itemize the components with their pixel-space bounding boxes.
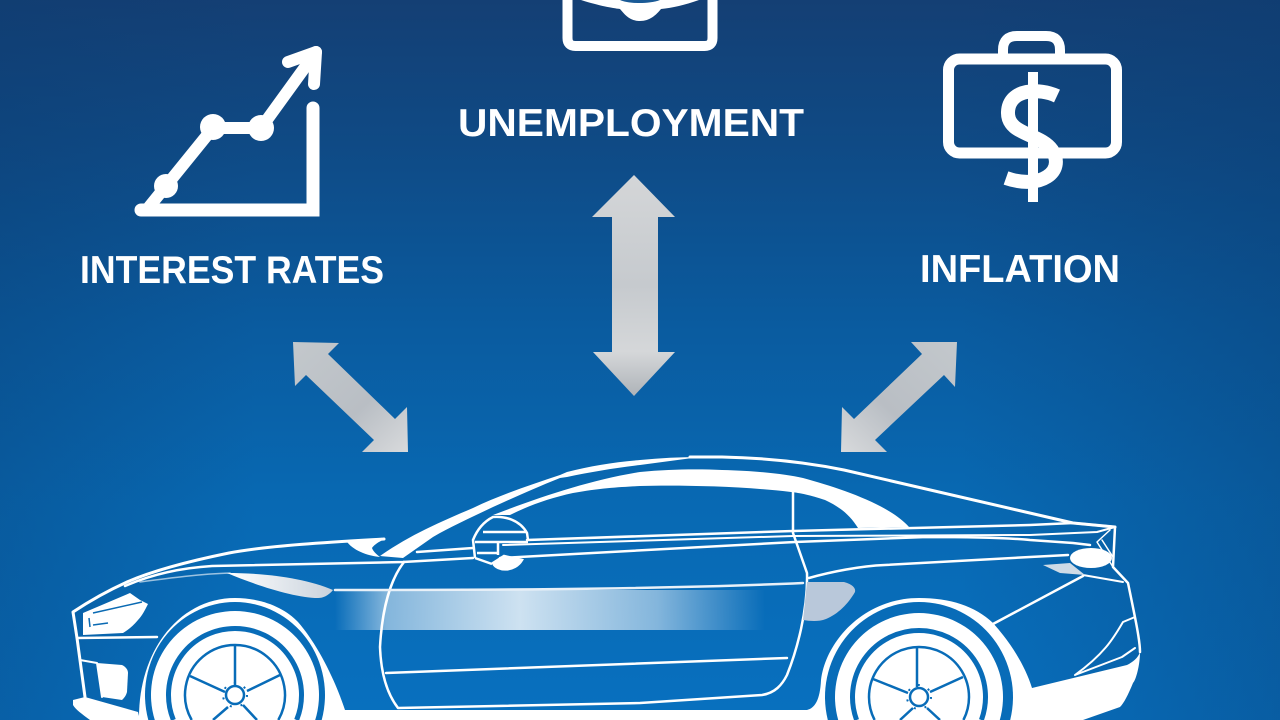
icon: interest rates chart [141,52,316,210]
taillight [1070,548,1112,568]
heading: interest rates: INTEREST RATES [80,249,384,292]
front arch and fender [139,598,345,720]
lower sill [330,710,812,720]
roof band [493,469,909,528]
door [380,492,807,708]
rear fender vent [803,582,855,621]
door highlight band [335,590,765,630]
icon: unemployment briefcase [568,0,712,46]
arrow: unemployment to car [592,175,675,396]
icon: inflation briefcase with dollar [948,36,1116,202]
arrow: inflation to car [841,342,957,452]
rear arch and bumper [807,598,1140,720]
arrow: interest rates to car [293,342,408,452]
front wheel [145,602,325,720]
rear wheel [825,602,1013,720]
headlight [83,593,148,635]
car illustration [73,457,1140,720]
front grille panel [97,663,128,700]
front bumper lower [73,697,140,720]
cowl blob [347,539,385,557]
heading: inflation: INFLATION [920,248,1120,291]
heading: unemployment: UNEMPLOYMENT [458,102,804,145]
car body outline [73,457,1140,708]
side mirror [473,517,528,569]
car white fills [73,457,1140,720]
windshield pillar [380,457,700,558]
front fender vent [227,573,333,598]
